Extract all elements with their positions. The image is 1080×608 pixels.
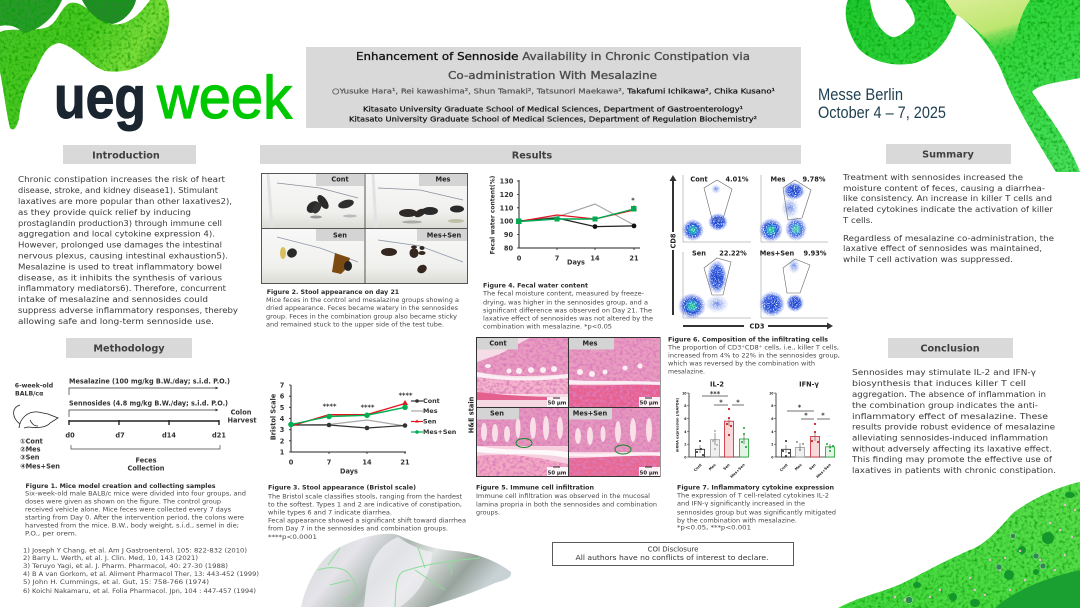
bar chart: IL-2: IL-2	[710, 380, 724, 388]
y axis ticks: 8	[684, 404, 687, 408]
text block: conclusion: aggregation. The absence of inflammation in	[852, 389, 1046, 399]
affiliations	[349, 104, 757, 124]
group list: ③Sen	[20, 454, 40, 462]
colon harvest label: Harvest	[227, 416, 257, 424]
line chart: Figure 4 fecal water content	[490, 175, 640, 266]
caption: Figure 6: which was reversed by the combination with	[668, 360, 815, 367]
legend: Sen	[423, 418, 437, 426]
group list: ②Mes	[20, 446, 41, 454]
caption: Figure 4	[482, 282, 653, 330]
section heading: Conclusion	[888, 338, 1013, 358]
title: Enhancement of Sennoside Availability in Chronic Constipation via	[356, 50, 750, 63]
text block: introduction: inflammatory mediators6). Therefore, concurrent	[18, 283, 227, 293]
references: 4) B A van Gorkom, et al. Aliment Pharmacol Ther, 13: 443-452 (1999)	[23, 571, 259, 578]
y axis labels: 120	[500, 191, 514, 199]
callouts: infiltration ovals	[516, 438, 631, 454]
photo: Cont	[262, 174, 364, 228]
legend: Cont	[423, 397, 440, 405]
category labels	[779, 463, 832, 479]
y axis ticks: 2	[684, 442, 686, 446]
caption: Figure 1: received vehicle alone. Mice feces were collected every 7 days	[25, 506, 231, 514]
colon harvest label: Colon	[231, 408, 252, 416]
category labels: Mes+Sen	[816, 463, 832, 479]
text block: introduction: suppress adverse inflammatory responses, thereby	[18, 305, 238, 315]
decoration: liver illustration	[301, 534, 511, 607]
mouse strain label: 6-week-old	[15, 382, 53, 390]
y axis labels: 80	[504, 244, 513, 252]
legend	[411, 397, 457, 436]
legend: Mes+Sen	[423, 428, 457, 436]
y axis labels: 2	[280, 437, 285, 445]
line chart: Figure 3 Bristol scale	[270, 382, 457, 476]
y axis ticks: 6	[771, 417, 774, 421]
caption: Figure 6: mesalazine.	[668, 368, 705, 375]
caption: Figure 6: Figure 6. Composition of the infiltrating cells	[668, 336, 828, 343]
x axis labels: 0	[289, 458, 294, 466]
text block: conclusion: alleviating sennosides-induced inflammation	[852, 432, 1048, 442]
arrow: CD3 axis: CD3	[750, 322, 765, 330]
series: Cont	[519, 218, 636, 229]
colon harvest label	[227, 408, 257, 424]
mesalazine arrow: Mesalazine (100 mg/kg B.W./day; s.i.d. P.O.)	[69, 377, 230, 385]
venue and date: October 4 – 7, 2025	[818, 103, 946, 122]
text block: conclusion: Sennosides may stimulate IL-2 and IFN-γ	[852, 367, 1036, 377]
photo: Cont: Cont	[331, 176, 349, 184]
micrographs: Figure 5 H&E stain	[476, 337, 660, 477]
series: Mes+Sen	[288, 404, 408, 427]
venue and date	[818, 85, 946, 122]
title	[356, 50, 750, 82]
y axis title: Fecal water content(%)	[490, 175, 496, 254]
mouse strain label	[15, 382, 53, 398]
category labels: Mes	[794, 463, 803, 471]
callout: COI disclosure: COI Disclosure	[648, 546, 698, 554]
section heading: Results	[260, 145, 801, 164]
text block: introduction: Chronic constipation increases the risk of heart	[18, 174, 226, 184]
icon: mouse	[14, 405, 58, 428]
labels	[477, 338, 614, 420]
scale bars: 50 µm	[640, 470, 659, 476]
plot: Mes: 9.78%	[803, 176, 826, 184]
y axis ticks: 0	[684, 456, 687, 460]
series: Mes	[291, 420, 405, 426]
y axis labels: 5	[280, 404, 285, 412]
significance: *	[736, 398, 740, 406]
decoration: bottom-right green organic shape	[838, 482, 1080, 608]
text block: introduction: nervous plexus, causing intestinal exhaustion5).	[18, 250, 228, 260]
sennosides arrow: Sennosides (4.8 mg/kg B.W./day; s.i.d. P.O.)	[69, 399, 228, 407]
text block: conclusion: This finding may promote the effective use of	[851, 454, 1053, 464]
x axis labels: 14	[590, 254, 600, 262]
text block: summary	[842, 172, 1054, 264]
y axis labels: 3	[280, 426, 285, 434]
photo: Mes+Sen: Mes+Sen	[427, 232, 462, 240]
text block: conclusion: laxatives in patients with chronic constipation.	[852, 465, 1056, 475]
significance marks	[323, 392, 413, 412]
plot: Cont	[682, 175, 751, 242]
text block: introduction	[18, 174, 238, 326]
caption: Figure 7: by the combination with mesalazine.	[677, 517, 797, 524]
timeline: d21	[212, 432, 226, 440]
references: 2) Barry L. Werth, et al. J. Clin. Med, 10, 143 (2021)	[23, 555, 198, 562]
y axis labels	[500, 178, 514, 252]
feces collection label: Feces	[135, 456, 157, 464]
y axis labels: 4	[280, 415, 285, 423]
significance marks: ****	[323, 402, 337, 410]
x axis labels: Days	[340, 468, 358, 476]
caption: Figure 3: while types 6 and 7 indicate diarrhea.	[268, 509, 392, 516]
scale bars: 50 µm	[548, 400, 567, 406]
significance: *	[804, 412, 808, 420]
x axis labels: 7	[327, 458, 332, 466]
group list: ④Mes+Sen	[20, 462, 60, 470]
micrograph: Cont	[477, 338, 568, 407]
section heading: Introduction: Introduction	[92, 150, 160, 162]
caption: Figure 4: drying, was higher in the sennosides group, and a	[483, 299, 648, 306]
caption: Figure 7: *p<0.05, ***p<0.001	[677, 525, 751, 532]
series: Sen	[519, 205, 637, 222]
photo: Sen: Sen	[333, 232, 347, 240]
text block: introduction: as they provide quick relief by inducing	[18, 207, 191, 217]
timeline: d14	[162, 432, 176, 440]
section heading: Methodology: Methodology	[93, 344, 165, 354]
text block: introduction: disease, as it inhibits the synthesis of various	[18, 272, 222, 282]
caption: Figure 6: increased from 4% to 22% in the sennosides group,	[668, 352, 840, 359]
H&E stain side label: H&E stain	[467, 396, 475, 433]
caption: Figure 4: Figure 4. Fecal water content	[483, 282, 588, 289]
text block: conclusion	[851, 367, 1056, 475]
scale bars: 50 µm	[640, 400, 659, 406]
arrow: CD3 axis	[683, 322, 833, 330]
legend: Mes	[423, 407, 438, 415]
affiliations: Kitasato University Graduate School of Medical Sciences, Department of Regulation Biochemistry²	[349, 114, 757, 124]
plot: Mes+Sen	[759, 250, 828, 318]
caption: Figure 5: Immune cell infiltration was observed in the mucosal	[476, 493, 650, 500]
y axis labels: 1	[280, 448, 285, 456]
scale bars: 50 µm	[548, 470, 567, 476]
caption: Figure 7: sennosides group but was significantly mitigated	[677, 509, 836, 516]
plot: Cont: Cont	[690, 176, 708, 184]
y axis ticks: 4	[771, 430, 774, 434]
y axis ticks: 6	[684, 417, 687, 421]
x axis labels: 0	[517, 254, 522, 262]
caption: Figure 7: The expression of T cell-related cytokines IL-2	[676, 492, 829, 499]
y axis labels	[280, 382, 285, 456]
caption: Figure 2: and remained stuck to the upper side of the test tube.	[266, 321, 444, 328]
callout: COI disclosure	[552, 542, 794, 566]
text block: conclusion: results provide robust evidence of mesalazine	[852, 422, 1055, 432]
significance marks: ****	[399, 392, 413, 400]
callout: COI disclosure: All authors have no conflicts of interest to declare.	[576, 554, 768, 562]
text block: introduction: Mesalazine is used to treat inflammatory bowel	[18, 262, 222, 272]
section heading: Summary	[886, 144, 1011, 164]
text block: summary: Regardless of mesalazine co-administration, the	[843, 233, 1054, 243]
caption: Figure 1: Six-week-old male BALB/c mice were divided into four groups, and	[25, 490, 246, 498]
arrow: CD8 axis: CD8	[670, 233, 678, 248]
caption: Figure 6	[667, 336, 840, 375]
y axis title: Bristol Scale	[270, 393, 278, 440]
text block: summary: Treatment with sennosides increased the	[842, 172, 1023, 182]
x axis labels: Days	[567, 258, 585, 266]
caption: Figure 3: to the softest. Types 1 and 2 are indicative of constipation,	[268, 501, 462, 508]
photo: Mes+Sen	[366, 229, 467, 283]
caption: Figure 2: Mice feces in the control and mesalazine groups showing a	[266, 297, 459, 304]
caption: Figure 2: dried appearance. Feces became watery in the sennosides	[266, 305, 458, 312]
series: Cont	[291, 423, 407, 430]
caption: Figure 3: The Bristol scale classifies stools, ranging from the hardest	[267, 493, 463, 500]
caption: Figure 1: starting from Day 0. After the intervention period, the colons were	[25, 514, 244, 522]
y axis ticks: 10	[682, 392, 687, 396]
caption: Figure 4: significant difference was observed on Day 21. The	[483, 307, 652, 314]
y axis labels: 100	[500, 218, 514, 226]
timeline	[65, 420, 226, 449]
significance marks: ****	[361, 404, 375, 412]
y axis ticks: 0	[771, 456, 774, 460]
y axis ticks: 10	[769, 392, 774, 396]
header panel	[306, 47, 801, 128]
feces collection label: Collection	[128, 464, 165, 472]
arrow: CD8 axis	[670, 175, 678, 315]
caption: Figure 1: Figure 1. Mice model creation and collecting samples	[26, 483, 216, 490]
section heading: Introduction	[63, 145, 196, 164]
references: 3) Teruyo Yagi, et al. J. Pharm. Pharmacol, 40: 27-30 (1988)	[23, 563, 228, 570]
plot: Mes	[759, 175, 828, 242]
labels: Cont	[489, 340, 507, 348]
logo: ueg week: ueg	[54, 64, 146, 131]
caption: Figure 7: and IFN-γ significantly increased in the	[677, 500, 805, 507]
flow cytometry: Figure 6	[670, 175, 833, 330]
photo panel: Figure 2 stool appearance	[261, 173, 468, 284]
section heading: Results: Results	[512, 150, 552, 162]
significance: *	[719, 398, 723, 406]
references	[23, 547, 259, 595]
references: 5) John H. Cummings, et al. Gut, 15: 758-766 (1974)	[23, 579, 209, 586]
y axis ticks: 2	[771, 442, 774, 446]
caption: Figure 1: harvested from the mice. B.W., body weight, s.i.d., semel in die;	[25, 522, 239, 530]
x axis labels	[517, 254, 639, 266]
caption: Figure 2: group. Feces in the combination group also became sticky	[266, 313, 457, 320]
y axis ticks: 4	[684, 430, 687, 434]
caption: Figure 3: Fecal appearance showed a significant shift toward diarrhea	[268, 517, 466, 524]
photo: Mes: Mes	[436, 176, 451, 184]
title: Co-administration With Mesalazine	[448, 69, 657, 82]
logo: ueg week	[54, 64, 293, 131]
labels: Mes	[583, 340, 598, 348]
plot: Mes+Sen: Mes+Sen	[760, 250, 795, 258]
micrograph: Mes+Sen	[569, 408, 660, 476]
plot: Cont: 4.01%	[726, 176, 749, 184]
category labels: Sen	[809, 463, 817, 471]
y axis ticks	[769, 392, 774, 460]
feces collection label	[128, 456, 165, 472]
logo: ueg week: week	[156, 64, 293, 131]
diagram: Figure 1 mouse protocol	[14, 377, 257, 472]
plot: Sen	[678, 250, 751, 319]
caption: Figure 7	[676, 484, 836, 532]
text block: introduction: prostaglandin production3) through immune cell	[18, 218, 222, 228]
category labels: Mes	[708, 463, 717, 471]
caption: Figure 3: Figure 3. Stool appearance (Bristol scale)	[268, 484, 416, 491]
mouse strain label: BALB/cα	[15, 390, 43, 398]
caption: Figure 4: The fecal moisture content, measured by freeze-	[482, 290, 644, 297]
significance	[787, 404, 830, 420]
y axis ticks: 8	[771, 404, 774, 408]
caption: Figure 7: Figure 7. Inflammatory cytokine expression	[677, 484, 834, 491]
photo: Sen	[262, 229, 364, 283]
bars	[696, 408, 748, 457]
caption: Figure 5: groups.	[476, 509, 500, 516]
caption: Figure 1: P.O., per orem.	[25, 530, 77, 538]
significance mark: *	[631, 196, 635, 204]
decoration: top-left green organic shape	[0, 0, 169, 130]
venue and date: Messe Berlin	[818, 85, 903, 104]
section heading: Methodology	[66, 338, 192, 358]
authors: ○Yusuke Hara¹, Rei kawashima², Shun Tamaki², Tatsunori Maekawa², Takafumi Ichikawa², Chika Kusano¹	[332, 86, 775, 96]
photo: Mes	[366, 174, 467, 228]
text block: conclusion: the combination group indicates the anti-	[852, 400, 1038, 410]
bar chart: IFN-γ: IFN-γ	[799, 380, 819, 388]
series: Sen	[291, 400, 408, 426]
mesalazine arrow	[69, 377, 230, 395]
category labels: Cont	[693, 463, 703, 472]
plot: Mes+Sen: 9.93%	[804, 250, 827, 258]
text block: conclusion: inflammatory effect of mesalazine. These	[852, 411, 1048, 421]
caption: Figure 3	[267, 484, 466, 541]
x axis labels: 7	[555, 254, 560, 262]
caption: Figure 4: combination with mesalazine. *p<0.05	[483, 323, 612, 330]
text block: summary: related cytokines indicate the activation of killer	[843, 204, 1054, 214]
bar chart: IL-2	[676, 380, 748, 479]
y axis labels: 6	[280, 393, 285, 401]
y axis labels: 7	[280, 382, 285, 390]
x axis labels	[289, 458, 410, 476]
text block: introduction: However, prolonged use damages the intestinal	[18, 240, 222, 250]
group list: ①Cont	[20, 438, 43, 446]
decoration: top-right green organic shape	[846, 0, 1080, 172]
sennosides arrow	[69, 399, 228, 417]
text block: introduction: allowing safe and long-term sennoside use.	[18, 316, 214, 326]
caption: Figure 5	[476, 484, 657, 516]
text block: summary: T cells.	[842, 215, 873, 225]
caption: Figure 3: ****p<0.0001	[268, 534, 317, 541]
section heading: Summary: Summary	[922, 150, 975, 160]
plot: Mes: Mes	[771, 176, 786, 184]
timeline: d0	[65, 432, 75, 440]
text block: conclusion: without adversely affecting its laxative effect.	[852, 444, 1052, 454]
significance: *	[821, 412, 825, 420]
micrograph: Sen	[477, 408, 568, 476]
bars	[782, 423, 834, 457]
text block: introduction: intake of mesalazine and sennosides could	[18, 294, 208, 304]
text block: introduction: aggregation and local cytokine expression 4).	[18, 228, 215, 238]
category labels: Mes+Sen	[730, 463, 746, 479]
plot: Sen: 22.22%	[719, 250, 747, 258]
caption: Figure 6: The proportion of CD3⁺CD8⁺ cells, i.e., killer T cells,	[667, 344, 839, 351]
affiliations: Kitasato University Graduate School of Medical Sciences, Department of Gastroenterology¹	[363, 104, 743, 114]
group list	[20, 438, 60, 470]
series: Mes	[519, 204, 634, 225]
category labels	[693, 463, 746, 479]
text block: summary: while T cell activation was suppressed.	[843, 254, 1013, 264]
labels: Sen	[490, 410, 504, 418]
references: 6) Koichi Nakamaru, et al. Folia Pharmacol. Jpn, 104 : 447-457 (1994)	[23, 588, 256, 595]
references: 1) Joseph Y Chang, et al. Am J Gastroenterol, 105: 822-832 (2010)	[23, 547, 247, 554]
text block: conclusion: biosynthesis that induces killer T cell	[852, 378, 1026, 388]
x axis labels: 21	[629, 254, 639, 262]
significance	[702, 390, 744, 406]
text block: summary: laxative effect of sennosides was maintained,	[843, 243, 1042, 253]
text block: summary: moisture content of feces, causing a diarrhea-	[843, 183, 1045, 193]
caption: Figure 2	[266, 289, 459, 328]
micrograph: Mes	[569, 338, 660, 407]
significance: *	[798, 404, 802, 412]
text block: summary: like consistency. An increase in killer T cells and	[843, 193, 1052, 203]
section heading: Conclusion: Conclusion	[920, 344, 980, 354]
x axis labels: 14	[362, 458, 372, 466]
caption: Figure 5: lamina propria in both the sennosides and combination	[476, 501, 657, 508]
significance: ***	[710, 390, 721, 398]
timeline: d7	[115, 432, 125, 440]
y axis labels: 130	[500, 178, 514, 186]
caption: Figure 4: laxative effect of sennosides was not altered by the	[483, 315, 653, 322]
y axis ticks	[682, 392, 687, 460]
scale bars	[547, 397, 660, 476]
series: Mes+Sen	[516, 206, 636, 224]
y axis labels: 110	[500, 204, 514, 212]
caption: Figure 2: Figure 2. Stool appearance on day 21	[267, 289, 399, 296]
caption: Figure 1	[25, 483, 246, 538]
y axis title: mRNA expression (/GAPDH)	[676, 397, 680, 452]
y axis labels: 90	[504, 231, 513, 239]
text block: introduction: laxatives are more popular than other laxatives2),	[18, 196, 232, 206]
caption: Figure 3: from Day 7 in the sennosides and combination groups.	[268, 525, 448, 532]
plot: Sen: Sen	[692, 250, 706, 258]
category labels: Cont	[779, 463, 789, 472]
labels: Mes+Sen	[573, 410, 608, 418]
text block: introduction: disease, stroke, and kidney disease1). Stimulant	[18, 185, 219, 195]
x axis labels: 21	[400, 458, 410, 466]
category labels: Sen	[723, 463, 731, 471]
caption: Figure 1: doses were given as shown on the figure. The control group	[25, 498, 221, 506]
caption: Figure 5: Figure 5. Immune cell infiltration	[476, 484, 594, 491]
bar chart: IFN-γ	[769, 380, 835, 479]
